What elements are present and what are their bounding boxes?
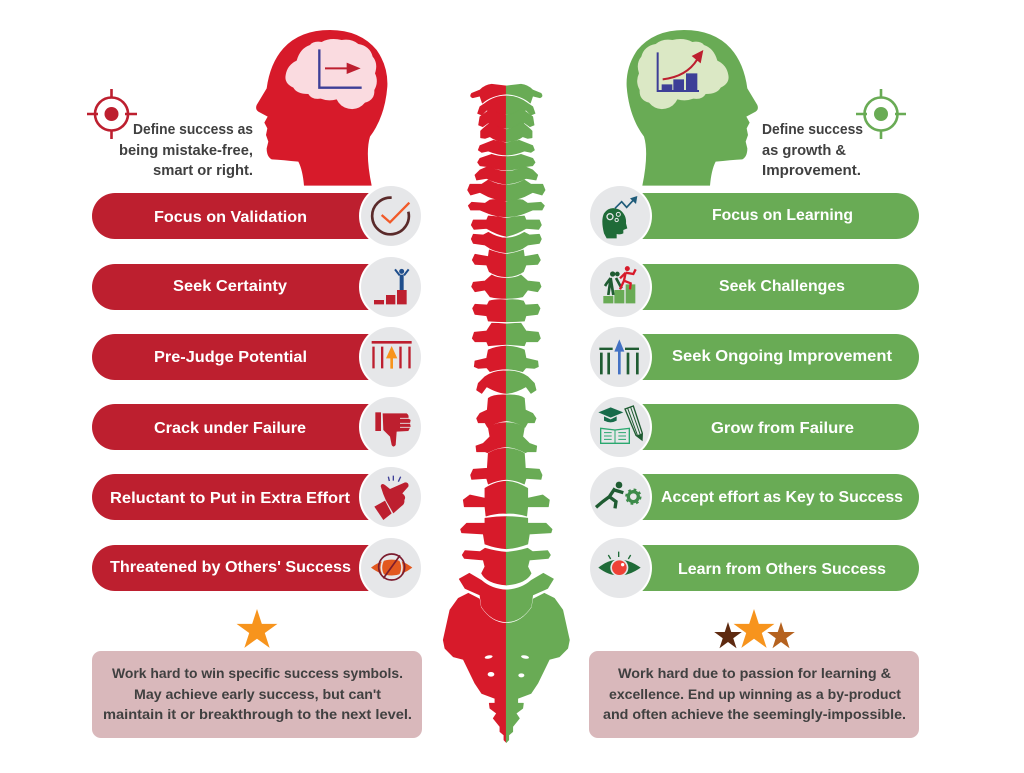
icon: red target [87,89,137,139]
pill: Crack under Failure: Crack under Failure [154,420,306,437]
pill: Learn from Others Success [588,536,919,600]
text: definition of success (growth): Improvement. [762,163,861,179]
callout: fixed mindset outcome: Work hard to win specific success symbols. [112,665,403,681]
text: definition of success (growth) [762,122,863,179]
text: definition of success (fixed) [119,122,253,179]
text: definition of success (growth): as growth & [762,143,846,159]
icon: person pushing gear [596,482,640,508]
spine: green right half [506,84,569,742]
pill: Reluctant to Put in Extra Effort [92,465,423,529]
pill: Pre-Judge Potential: Pre-Judge Potential [154,349,307,366]
pill: Seek Challenges: Seek Challenges [719,278,845,295]
panel: growth mindset (right) [588,30,919,738]
pill: Focus on Validation [92,184,423,248]
pill: Learn from Others Success: Learn from Others Success [678,561,886,578]
icon: crossed-out eye [371,554,412,580]
icon: thumbs down [375,412,411,447]
callout: growth mindset outcome: excellence. End up winning as a by-product [609,686,901,702]
icon: pillars with orange arrow [372,341,412,369]
pill: Crack under Failure [92,395,423,459]
text: definition of success (fixed): smart or right. [153,163,253,179]
pill: Focus on Learning [588,184,919,248]
icon: eye with red iris [598,552,641,577]
pill: Threatened by Others' Success [92,536,423,600]
icon: pointing hand [374,476,409,520]
icon: check mark [372,198,409,234]
icon: person on steps [374,269,409,304]
spine: red left half [443,84,506,742]
pill: Grow from Failure [588,395,919,459]
icon: runners on steps [603,266,636,303]
callout: fixed mindset outcome: May achieve early success, but can't [134,686,381,702]
icon: green target [856,89,906,139]
pill: Focus on Learning: Focus on Learning [712,207,853,224]
pill: Accept effort as Key to Success [588,465,919,529]
icon: orange star [237,609,277,648]
callout: fixed mindset outcome [92,651,422,738]
pill: Seek Ongoing Improvement [588,325,919,389]
text: definition of success (fixed): being mistake-free, [119,143,253,159]
icon: green head with growth chart brain [627,30,758,186]
pill: Grow from Failure: Grow from Failure [711,420,854,437]
icon: red head with flat chart brain [256,30,387,186]
callout: growth mindset outcome: and often achieve the seemingly-impossible. [603,706,906,722]
pill: Focus on Validation: Focus on Validation [154,209,307,226]
callout: growth mindset outcome [589,651,919,738]
text: definition of success (fixed): Define success as [133,122,253,138]
pill: Seek Ongoing Improvement: Seek Ongoing Improvement [672,348,893,365]
pill: Accept effort as Key to Success: Accept effort as Key to Success [661,489,903,506]
pill: Pre-Judge Potential [92,325,423,389]
callout: fixed mindset outcome: maintain it or breakthrough to the next level. [103,706,412,722]
text: definition of success (growth): Define success [762,122,863,138]
pill: Seek Certainty: Seek Certainty [173,278,287,295]
icon: three stars [714,609,795,648]
pill: Seek Certainty [92,255,423,319]
pill: Seek Challenges [588,255,919,319]
panel: fixed mindset (left) [87,30,423,738]
pill: Threatened by Others' Success: Threatened by Others' Success [110,559,351,576]
icon: pillars with blue arrow [599,339,639,374]
callout: growth mindset outcome: Work hard due to passion for learning & [618,665,891,681]
icon: cap, book and pencil [598,406,642,443]
icon: head with gears and arrow [602,196,637,238]
pill: Reluctant to Put in Extra Effort: Reluctant to Put in Extra Effort [110,490,351,507]
spine [443,84,569,742]
